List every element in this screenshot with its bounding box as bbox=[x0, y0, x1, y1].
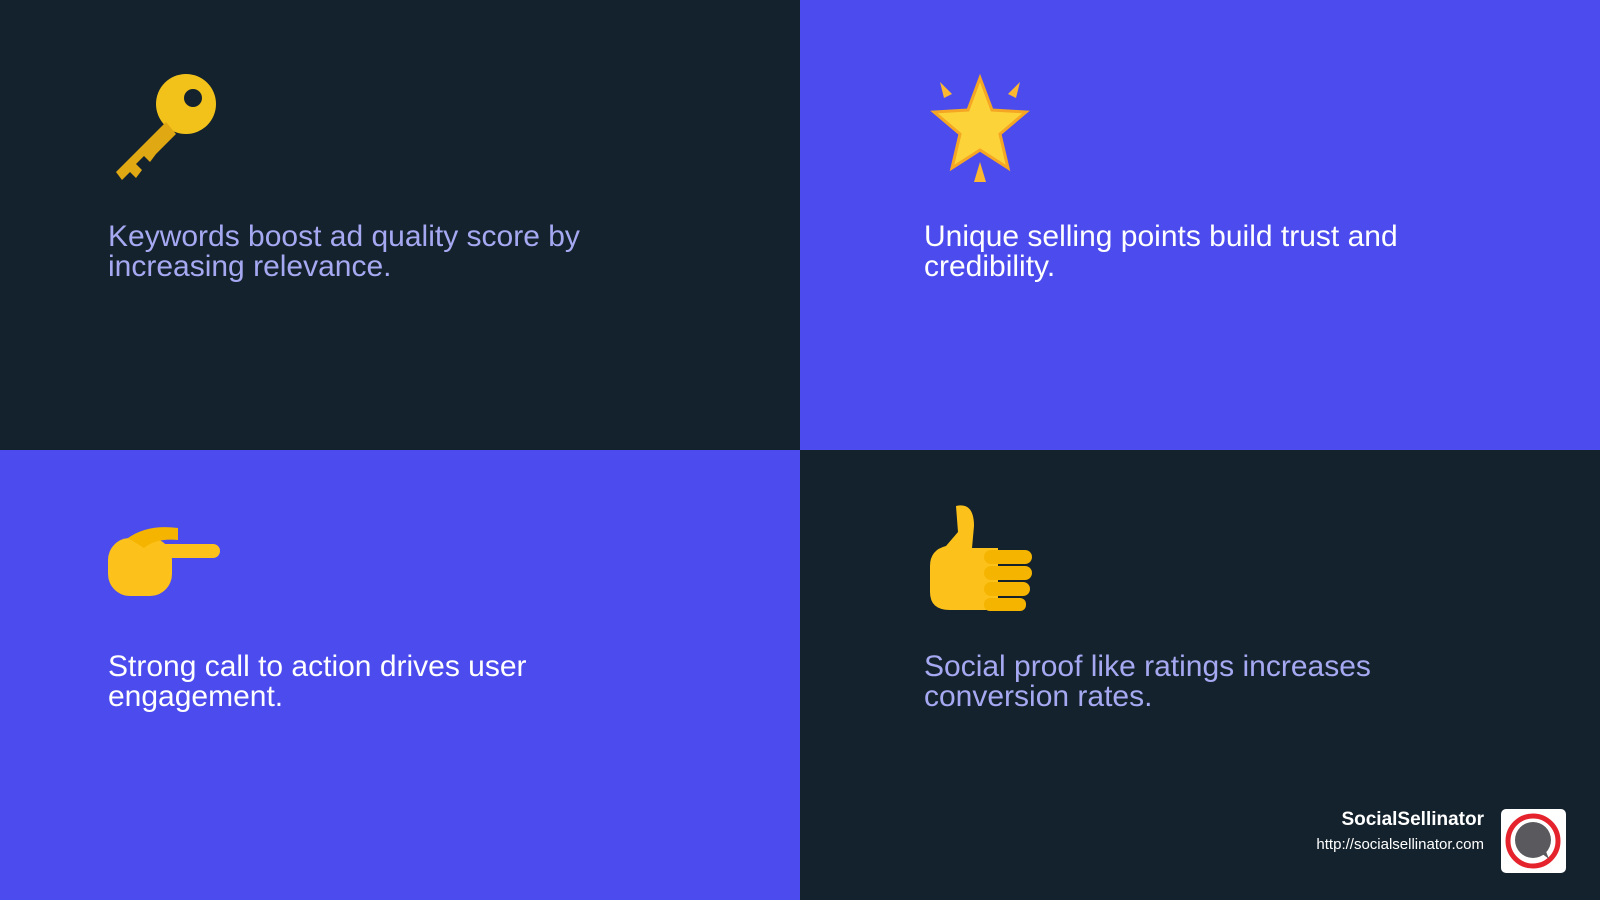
brand url: http://socialsellinator.com bbox=[1316, 836, 1484, 853]
icon: thumbs up bbox=[930, 505, 1032, 611]
icon: pointing hand bbox=[108, 527, 220, 596]
brand name: SocialSellinator bbox=[1341, 809, 1484, 830]
text: usp: Unique selling points build trust and credibility. bbox=[924, 220, 1398, 283]
icon: key bbox=[116, 74, 216, 180]
panel: social proof bbox=[800, 450, 1600, 900]
text: cta: Strong call to action drives user engagement. bbox=[108, 650, 527, 713]
logo bbox=[1501, 809, 1566, 873]
text: social proof: Social proof like ratings increases conversion rates. bbox=[924, 650, 1371, 713]
panel: keywords bbox=[0, 0, 800, 450]
icon: star bbox=[930, 74, 1030, 182]
panel: unique selling points bbox=[800, 0, 1600, 450]
brand block bbox=[1316, 809, 1566, 873]
panel: call to action bbox=[0, 450, 800, 900]
text: keywords: Keywords boost ad quality score by increasing relevance. bbox=[108, 220, 580, 283]
